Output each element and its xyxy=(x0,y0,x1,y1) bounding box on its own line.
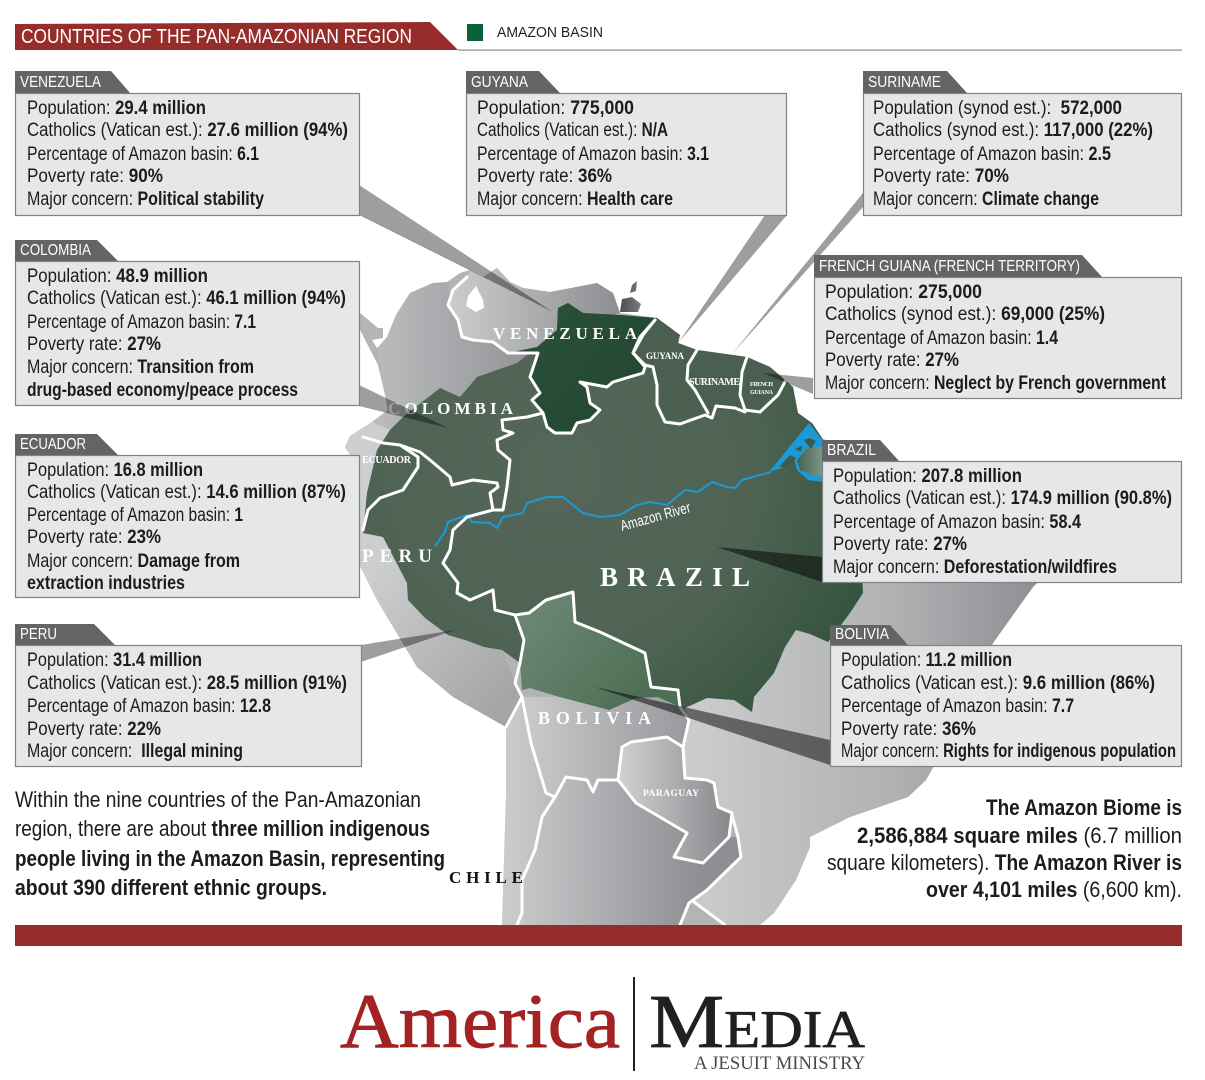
panel: Colombia: Poverty rate: 27% xyxy=(27,334,161,355)
label: Suriname: SURINAME xyxy=(689,377,740,388)
label: French Guiana: FRENCH xyxy=(750,382,773,388)
panel: Venezuela: Catholics (Vatican est.): 27.6 million (94%) xyxy=(27,120,348,141)
panel: Peru: Catholics (Vatican est.): 28.5 million (91%) xyxy=(27,673,347,694)
map of South America xyxy=(340,268,1040,925)
panel: Ecuador: Major concern: Damage from xyxy=(27,551,240,572)
panel: Ecuador xyxy=(15,434,360,598)
panel: Colombia xyxy=(15,240,360,406)
wordmark: Media: MEDIA xyxy=(649,980,865,1064)
Amazon basin: Venezuela xyxy=(508,303,657,433)
map labels xyxy=(362,324,774,887)
panel: French Guiana: Population: 275,000 xyxy=(825,282,982,303)
panel: Colombia: Percentage of Amazon basin: 7.1 xyxy=(27,312,256,333)
panel: Peru: Percentage of Amazon basin: 12.8 xyxy=(27,696,271,717)
panel: Bolivia: Population: 11.2 million xyxy=(841,650,1012,671)
pointer: French Guiana xyxy=(763,373,813,394)
logo: America Media xyxy=(340,977,865,1074)
panel: Suriname: Major concern: Climate change xyxy=(873,189,1099,210)
panel: Ecuador: extraction industries xyxy=(27,573,185,594)
Amazon basin: Guianas xyxy=(633,318,785,422)
panel: French Guiana xyxy=(814,255,1182,398)
panel: Colombia: drug-based economy/peace process xyxy=(27,380,298,401)
Lake Maracaibo xyxy=(466,286,484,312)
text block: indigenous people: region, there are about three million indigenous xyxy=(15,816,430,841)
pointer: Guyana xyxy=(679,215,787,342)
panel: Ecuador: ECUADOR xyxy=(20,436,86,453)
panel: Suriname: Catholics (synod est.): 117,000 (22%) xyxy=(873,120,1153,141)
text block: indigenous people: people living in the Amazon Basin, representing xyxy=(15,846,445,871)
panel: Venezuela xyxy=(15,71,360,216)
panel: Suriname xyxy=(863,71,1182,216)
text block: indigenous people: about 390 different ethnic groups. xyxy=(15,875,327,900)
panel: Peru: Poverty rate: 22% xyxy=(27,719,161,740)
text block: indigenous people: Within the nine countries of the Pan-Amazonian xyxy=(15,787,421,812)
pointer: Brazil xyxy=(717,547,822,582)
text block: Amazon biome: 2,586,884 square miles (6.7 million xyxy=(857,823,1182,848)
panel: French Guiana: Percentage of Amazon basin: 1.4 xyxy=(825,328,1058,349)
text block: Amazon biome xyxy=(827,795,1182,902)
footer bar xyxy=(15,925,1182,946)
pointer: Peru xyxy=(361,630,455,662)
land: Venezuela xyxy=(449,268,620,353)
panel: Suriname: SURINAME xyxy=(868,74,941,91)
land: Ecuador and Peru coast xyxy=(340,422,522,727)
panel: Suriname: Poverty rate: 70% xyxy=(873,166,1009,187)
panel: Ecuador: Population: 16.8 million xyxy=(27,460,203,481)
callout pointers xyxy=(359,185,863,765)
panel: French Guiana: Catholics (synod est.): 69,000 (25%) xyxy=(825,304,1105,325)
panel: Bolivia xyxy=(830,625,1182,766)
label: Guiana: GUIANA xyxy=(750,390,774,396)
label: Amazon River: Amazon River xyxy=(619,499,692,535)
panel: Venezuela: Major concern: Political stability xyxy=(27,189,264,210)
text block: Amazon biome: square kilometers). The Amazon River is xyxy=(827,850,1182,875)
panel: Brazil: Poverty rate: 27% xyxy=(833,534,967,555)
panel: Colombia: Catholics (Vatican est.): 46.1 million (94%) xyxy=(27,288,346,309)
land: continent base xyxy=(340,268,1040,925)
Amazon River xyxy=(435,472,771,546)
panel: Brazil: BRAZIL xyxy=(827,442,876,459)
panel: French Guiana: Major concern: Neglect by French government xyxy=(825,373,1167,394)
country borders xyxy=(363,277,787,925)
panel: Brazil: Population: 207.8 million xyxy=(833,466,1022,487)
panel: Brazil: Percentage of Amazon basin: 58.4 xyxy=(833,512,1081,533)
panel: Brazil: Major concern: Deforestation/wildfires xyxy=(833,557,1117,578)
pointer: Venezuela xyxy=(359,185,553,312)
pointer: Colombia xyxy=(359,385,448,428)
panel: Suriname: Population (synod est.): 572,000 xyxy=(873,98,1122,119)
panel: Colombia: Population: 48.9 million xyxy=(27,266,208,287)
panel: Peru xyxy=(15,624,362,766)
land: Colombia xyxy=(372,282,537,430)
panel: Guyana xyxy=(466,71,786,216)
panel: Ecuador: Percentage of Amazon basin: 1 xyxy=(27,505,243,526)
label: Colombia: COLOMBIA xyxy=(388,399,514,418)
panel: Venezuela: Poverty rate: 90% xyxy=(27,166,163,187)
panel: Guyana: Population: 775,000 xyxy=(477,98,634,119)
label: Brazil: BRAZIL xyxy=(600,562,750,592)
panel: Bolivia: Catholics (Vatican est.): 9.6 million (86%) xyxy=(841,673,1155,694)
panel: French Guiana: FRENCH GUIANA (FRENCH TERRITORY) xyxy=(819,258,1080,275)
panel: Bolivia: Poverty rate: 36% xyxy=(841,719,976,740)
land: Bolivia south xyxy=(522,697,689,793)
label: Paraguay: PARAGUAY xyxy=(643,789,699,799)
title banner: COUNTRIES OF THE PAN-AMAZONIAN REGION xyxy=(21,26,412,48)
panel: Brazil: Catholics (Vatican est.): 174.9 million (90.8%) xyxy=(833,488,1172,509)
panel: Bolivia: BOLIVIA xyxy=(835,626,890,643)
text block: Amazon biome: over 4,101 miles (6,600 km). xyxy=(926,877,1182,902)
Amazon basin: Bolivia xyxy=(515,592,680,710)
panel: Colombia: Major concern: Transition from xyxy=(27,357,254,378)
land: southern Brazil xyxy=(683,480,1040,925)
legend: Amazon Basin: AMAZON BASIN xyxy=(497,24,603,41)
panel: Ecuador: Catholics (Vatican est.): 14.6 million (87%) xyxy=(27,482,346,503)
panel: Venezuela: Percentage of Amazon basin: 6.1 xyxy=(27,144,259,165)
panel: Ecuador: Poverty rate: 23% xyxy=(27,527,161,548)
panel: Venezuela: VENEZUELA xyxy=(20,74,102,91)
panel: French Guiana: Poverty rate: 27% xyxy=(825,350,959,371)
panel: Bolivia: Percentage of Amazon basin: 7.7 xyxy=(841,696,1074,717)
Amazon basin xyxy=(363,303,863,712)
panel: Guyana: Percentage of Amazon basin: 3.1 xyxy=(477,144,709,165)
text block: indigenous people xyxy=(15,787,445,900)
Trinidad and Orinoco delta xyxy=(620,281,641,312)
wordmark: America: America xyxy=(340,978,620,1064)
label: Chile: CHILE xyxy=(449,868,523,887)
panel: Colombia: COLOMBIA xyxy=(20,242,92,259)
panel: Peru: PERU xyxy=(20,626,57,643)
label: Guyana: GUYANA xyxy=(646,351,684,361)
panel: Brazil xyxy=(822,440,1182,582)
label: Ecuador: ECUADOR xyxy=(362,455,412,466)
panel: Peru: Population: 31.4 million xyxy=(27,650,202,671)
land: Chile and Argentina xyxy=(502,697,741,925)
panel: Suriname: Percentage of Amazon basin: 2.5 xyxy=(873,144,1111,165)
panel: Guyana: Poverty rate: 36% xyxy=(477,166,612,187)
tagline: A JESUIT MINISTRY xyxy=(694,1054,865,1074)
pointer: Suriname xyxy=(732,193,863,354)
panel: Guyana: Catholics (Vatican est.): N/A xyxy=(477,120,668,141)
label: Peru: PERU xyxy=(362,546,432,567)
land: Paraguay xyxy=(618,737,732,863)
label: Bolivia: BOLIVIA xyxy=(538,708,651,728)
panel: Venezuela: Population: 29.4 million xyxy=(27,98,206,119)
pointer: Bolivia xyxy=(595,687,830,765)
panel: Guyana: GUYANA xyxy=(471,74,529,91)
panel: Guyana: Major concern: Health care xyxy=(477,189,673,210)
Amazon delta xyxy=(769,423,823,482)
label: Venezuela: VENEZUELA xyxy=(493,324,638,343)
panel: Peru: Major concern: Illegal mining xyxy=(27,741,243,762)
